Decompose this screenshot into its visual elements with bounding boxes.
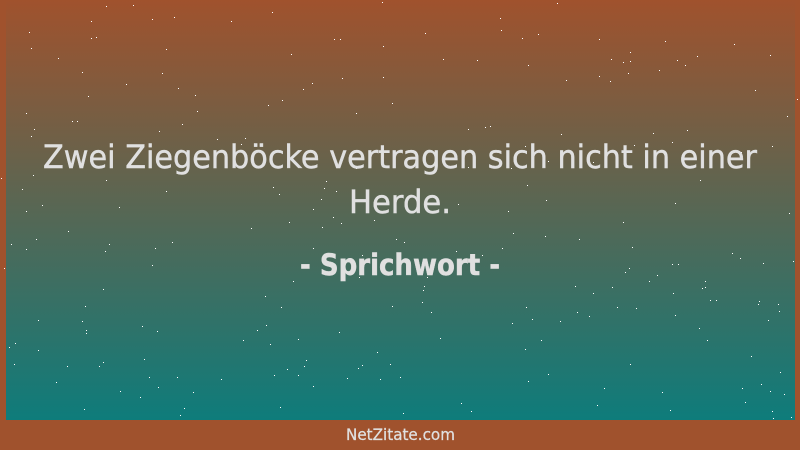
quote line 2: Herde. (349, 183, 451, 221)
quote line 1: Zwei Ziegenböcke vertragen sich nicht in einer (43, 138, 758, 176)
footer site name: NetZitate.com (346, 425, 455, 444)
quote text (43, 138, 758, 221)
author: - Sprichwort - (300, 248, 500, 282)
